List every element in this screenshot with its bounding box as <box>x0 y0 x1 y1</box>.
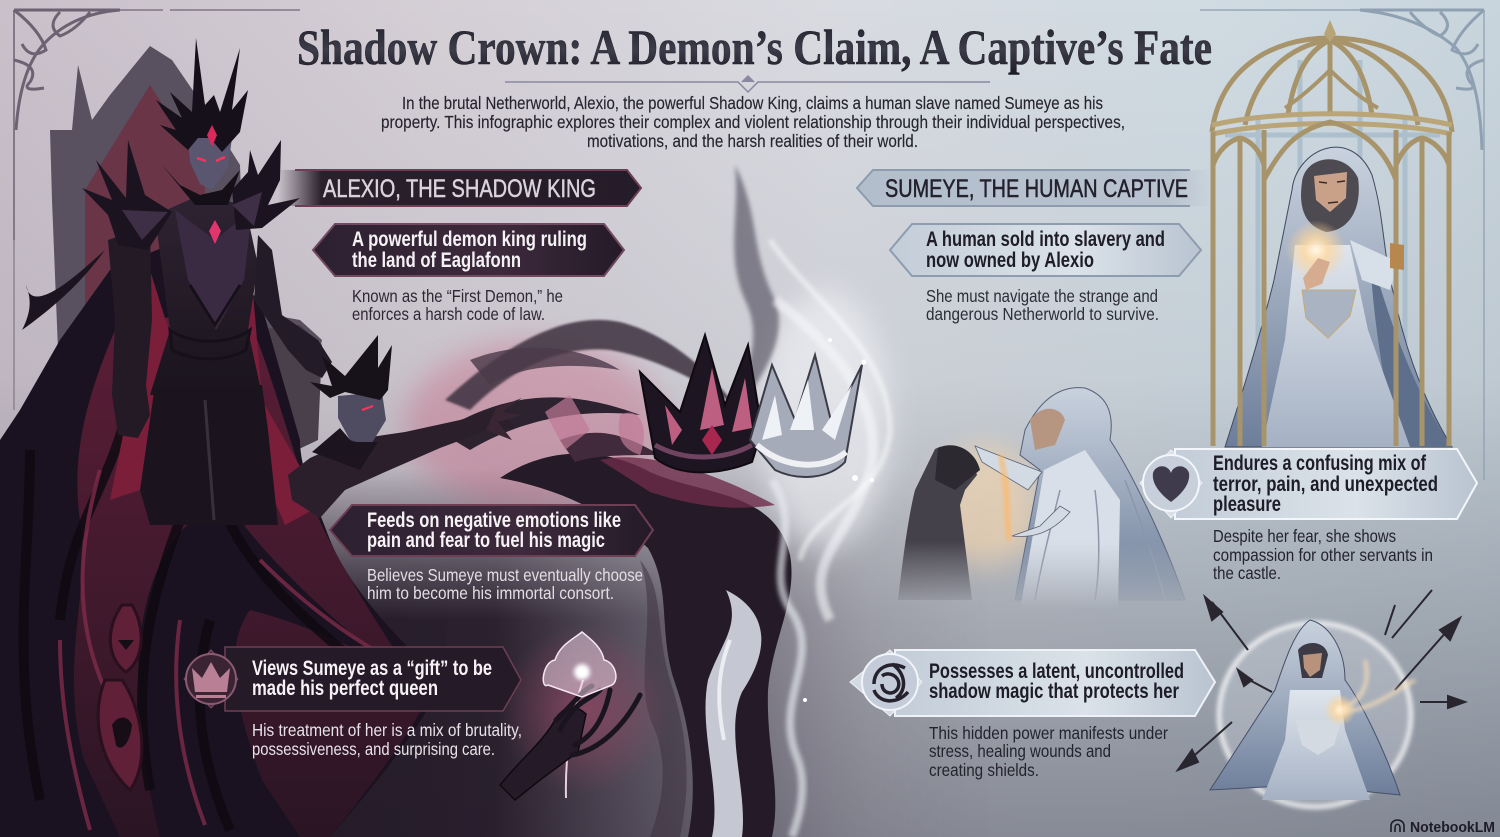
text: first demon <box>352 286 563 324</box>
callout: feeds on emotions <box>330 505 653 556</box>
illustration: silver crown <box>750 355 862 477</box>
king: left arm <box>108 225 152 438</box>
callout: confusing mix: Endures a confusing mix of <box>1213 452 1427 475</box>
illustration: small Alexio reaching <box>288 335 522 518</box>
intro text: property. This infographic explores their complex and violent relationship through their individual perspectives, <box>381 112 1125 132</box>
king: pauldrons and spikes <box>82 140 300 250</box>
icon: crown medallion <box>184 650 238 708</box>
callout: perfect queen: made his perfect queen <box>252 677 438 700</box>
woman: cape <box>1225 147 1452 447</box>
illustration: shadow crown <box>640 335 762 472</box>
banner: Sumeye: SUMEYE, THE HUMAN CAPTIVE <box>885 175 1188 203</box>
king: collar <box>162 165 240 205</box>
text: first demon: enforces a harsh code of law. <box>352 304 545 324</box>
illustration: healer scene <box>898 388 1185 610</box>
banner: Alexio <box>278 170 641 206</box>
text: brutality and care: possessiveness, and surprising care. <box>252 739 495 759</box>
text: compassion: the castle. <box>1213 563 1281 583</box>
callout: confusing mix: pleasure <box>1213 493 1281 516</box>
title: Shadow Crown: A Demon’s Claim, A Captive’s Fate <box>297 19 1212 75</box>
woman: hand on bar <box>1390 243 1404 270</box>
text: first demon: Known as the “First Demon,” he <box>352 286 563 306</box>
woman: dress <box>1262 245 1410 447</box>
intro text: motivations, and the harsh realities of their world. <box>587 131 918 151</box>
text: immortal consort: him to become his immortal consort. <box>367 583 614 603</box>
callout: latent shadow magic: shadow magic that protects her <box>929 680 1179 703</box>
text: brutality and care <box>252 720 522 759</box>
king: crown gem <box>207 125 217 147</box>
callout: demon king ruling <box>313 224 624 276</box>
callout: confusing mix: terror, pain, and unexpected <box>1213 473 1438 496</box>
illustration: Alexio cloak <box>0 240 440 837</box>
callout: human sold: now owned by Alexio <box>926 249 1094 272</box>
illustration: caged Sumeye <box>1212 20 1452 447</box>
text: compassion: compassion for other servants in <box>1213 545 1433 565</box>
text: hidden power: creating shields. <box>929 760 1039 780</box>
icon: spiral medallion <box>850 650 922 716</box>
illustration: hand holding flower <box>500 625 670 800</box>
arrows <box>1178 590 1465 770</box>
text: hidden power: This hidden power manifests under <box>929 723 1168 743</box>
callout: latent shadow magic: Possesses a latent, uncontrolled <box>929 660 1184 683</box>
cage: finial <box>1324 20 1336 42</box>
callout: latent shadow magic <box>850 650 1215 716</box>
intro text: In the brutal Netherworld, Alexio, the powerful Shadow King, claims a human slave named Sumeye as his <box>402 93 1103 113</box>
text: navigate: dangerous Netherworld to survive. <box>926 304 1159 324</box>
king: torso <box>150 195 262 395</box>
text: immortal consort <box>367 565 643 603</box>
text: hidden power: stress, healing wounds and <box>929 741 1111 761</box>
title flourish <box>505 76 990 92</box>
text: immortal consort: Believes Sumeye must eventually choose <box>367 565 643 585</box>
text: hidden power <box>929 723 1168 780</box>
intro text <box>381 93 1125 151</box>
callout: demon king ruling: A powerful demon king ruling <box>352 228 587 251</box>
corner ornament: top left <box>14 10 300 410</box>
callout: human sold <box>890 224 1201 276</box>
king: eyes <box>197 157 225 161</box>
logo: NotebookLM: NotebookLM <box>1410 819 1495 836</box>
king: red cloak <box>110 270 322 525</box>
text: brutality and care: His treatment of her is a mix of brutality, <box>252 720 522 740</box>
king: right arm <box>254 235 332 378</box>
text: compassion <box>1213 526 1433 583</box>
callout: human sold: A human sold into slavery and <box>926 228 1165 251</box>
woman: arm to bar <box>1350 240 1398 290</box>
king: long hair tails <box>22 250 105 330</box>
woman: chest glow <box>1286 220 1346 280</box>
banner: Sumeye <box>857 170 1212 206</box>
callout: perfect queen <box>184 647 521 711</box>
callout: feeds on emotions: pain and fear to fuel his magic <box>367 529 605 552</box>
cage: gold bars and dome <box>1212 35 1452 446</box>
text: navigate: She must navigate the strange and <box>926 286 1158 306</box>
callout: feeds on emotions: Feeds on negative emotions like <box>367 509 621 532</box>
icon: heart medallion <box>1140 450 1202 518</box>
text: compassion: Despite her fear, she shows <box>1213 526 1396 546</box>
illustration: shielded Sumeye <box>1178 590 1465 807</box>
cage: back bars <box>1225 60 1440 440</box>
banner: Alexio: ALEXIO, THE SHADOW KING <box>323 175 596 203</box>
woman: bodice <box>1302 290 1356 338</box>
corner ornament: top right <box>1200 10 1484 480</box>
king: chest plate <box>175 210 252 330</box>
woman: inner hood hair <box>1301 159 1359 232</box>
callout: demon king ruling: the land of Eaglafonn <box>352 249 521 272</box>
king: head <box>188 138 232 190</box>
text: navigate <box>926 286 1159 324</box>
illustration: Alexio figure <box>22 38 332 525</box>
king: legs and robe <box>140 385 278 525</box>
king: gem <box>209 220 221 244</box>
king: crown <box>156 38 248 152</box>
callout: perfect queen: Views Sumeye as a “gift” to be <box>252 657 492 680</box>
woman: right cape shadow <box>1370 250 1452 447</box>
illustration: smoke tendrils <box>405 165 890 837</box>
woman: hand on chest <box>1303 258 1330 290</box>
illustration: throne <box>50 46 322 480</box>
callout: confusing mix <box>1140 449 1477 519</box>
woman: face <box>1314 172 1347 212</box>
